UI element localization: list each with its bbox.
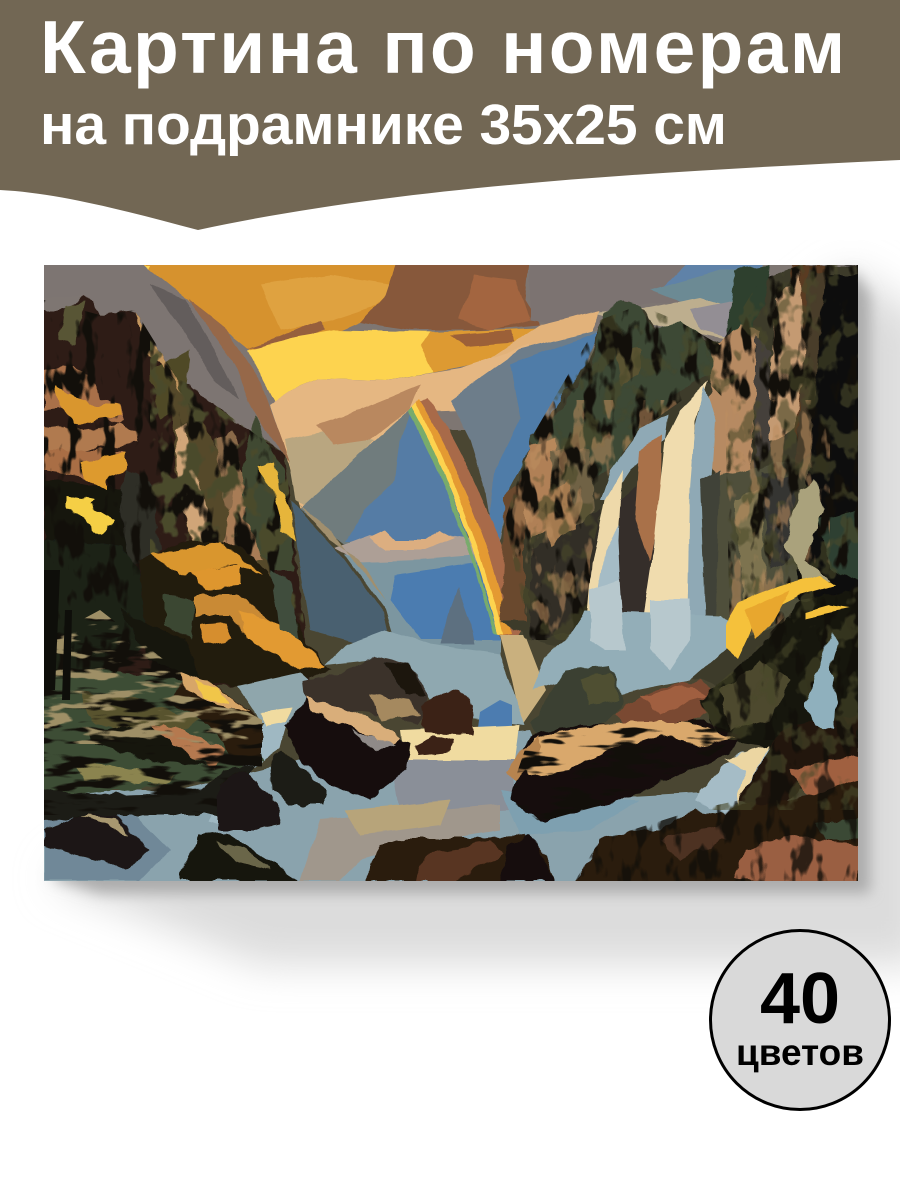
canvas drop shadow (46, 262, 900, 979)
right foreground rocks (505, 590, 870, 890)
pale foliage on right (785, 480, 830, 590)
valley mist (325, 630, 525, 725)
subtitle: на подрамнике 35х25 см (40, 93, 727, 157)
mist highlights (590, 580, 690, 670)
hillside highlights (180, 672, 250, 712)
yellow tree right (725, 575, 850, 660)
sky (44, 265, 857, 430)
header banner background (0, 0, 900, 230)
title: Картина по номерам (40, 5, 848, 89)
painting: mountain waterfall with rainbow (44, 265, 858, 881)
left tree trunks (44, 570, 72, 700)
left cliff mottling (44, 300, 304, 681)
rocks (44, 655, 555, 881)
right cliff mottling (500, 265, 830, 645)
blue-grey tree (805, 632, 838, 730)
waterfalls (585, 382, 720, 640)
mist at waterfall base (532, 610, 728, 695)
foreground (30, 672, 740, 895)
right cliffs (500, 265, 858, 686)
rainbow base glow (500, 635, 546, 725)
badge: 40 colours (709, 929, 891, 1111)
orange autumn tree (140, 540, 330, 690)
distant mountains (270, 330, 598, 660)
left cliff highlights (55, 385, 296, 540)
badge label: цветов (736, 1032, 864, 1073)
hillside mottling (44, 610, 262, 815)
lower right mottling (575, 590, 865, 885)
rainbow: outer brown, orange, yellow, green bands (408, 398, 530, 635)
left grey mountain (130, 265, 290, 462)
small blue pool (478, 700, 512, 728)
hillside left (30, 610, 262, 825)
badge number: 40 (760, 959, 840, 1039)
left cliffs and forest (30, 295, 310, 700)
rock mottling (515, 722, 725, 820)
